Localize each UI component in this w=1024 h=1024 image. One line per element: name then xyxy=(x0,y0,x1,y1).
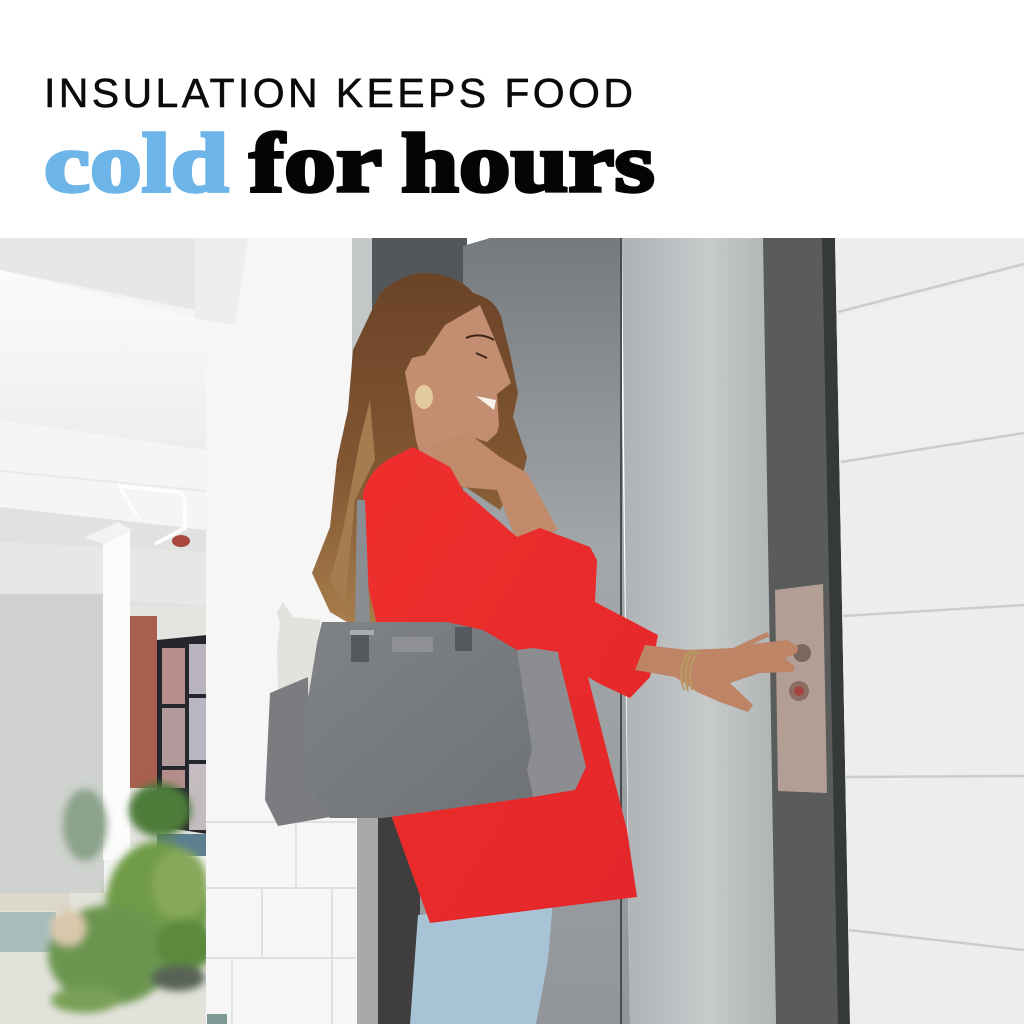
white brick wall xyxy=(835,238,1024,1024)
hair highlight xyxy=(330,400,375,605)
straps tabs xyxy=(351,632,369,662)
heading line: insulation keeps food: INSULATION KEEPS FOOD xyxy=(44,70,636,116)
hair xyxy=(312,273,527,625)
eye and mouth xyxy=(466,335,494,358)
face and neck xyxy=(405,305,511,470)
background room xyxy=(0,238,210,1024)
floor xyxy=(0,893,206,1024)
jeans xyxy=(410,900,553,1024)
left pocket xyxy=(265,677,330,826)
bracelets xyxy=(681,651,699,691)
bag body xyxy=(303,622,533,818)
red blazer xyxy=(362,447,658,923)
brick pier xyxy=(130,616,157,788)
strap xyxy=(355,500,370,625)
right pocket xyxy=(517,648,586,797)
water bottle xyxy=(277,602,320,690)
heading line: cold for hours: cold for hours xyxy=(44,117,655,210)
window xyxy=(157,635,207,834)
column xyxy=(103,530,130,860)
elevator button panel xyxy=(775,584,827,793)
elevator doors xyxy=(372,238,850,1024)
label xyxy=(392,637,433,652)
tote bag xyxy=(265,500,586,826)
forearm and hand at chin xyxy=(427,432,558,545)
photo: woman pressing elevator button xyxy=(0,238,1024,1024)
woman xyxy=(265,273,798,1024)
earring xyxy=(415,385,433,409)
pipe and alarm xyxy=(118,486,185,544)
white column wall xyxy=(195,238,379,1024)
plants xyxy=(48,783,215,1013)
forearm and outstretched hand xyxy=(635,632,798,712)
